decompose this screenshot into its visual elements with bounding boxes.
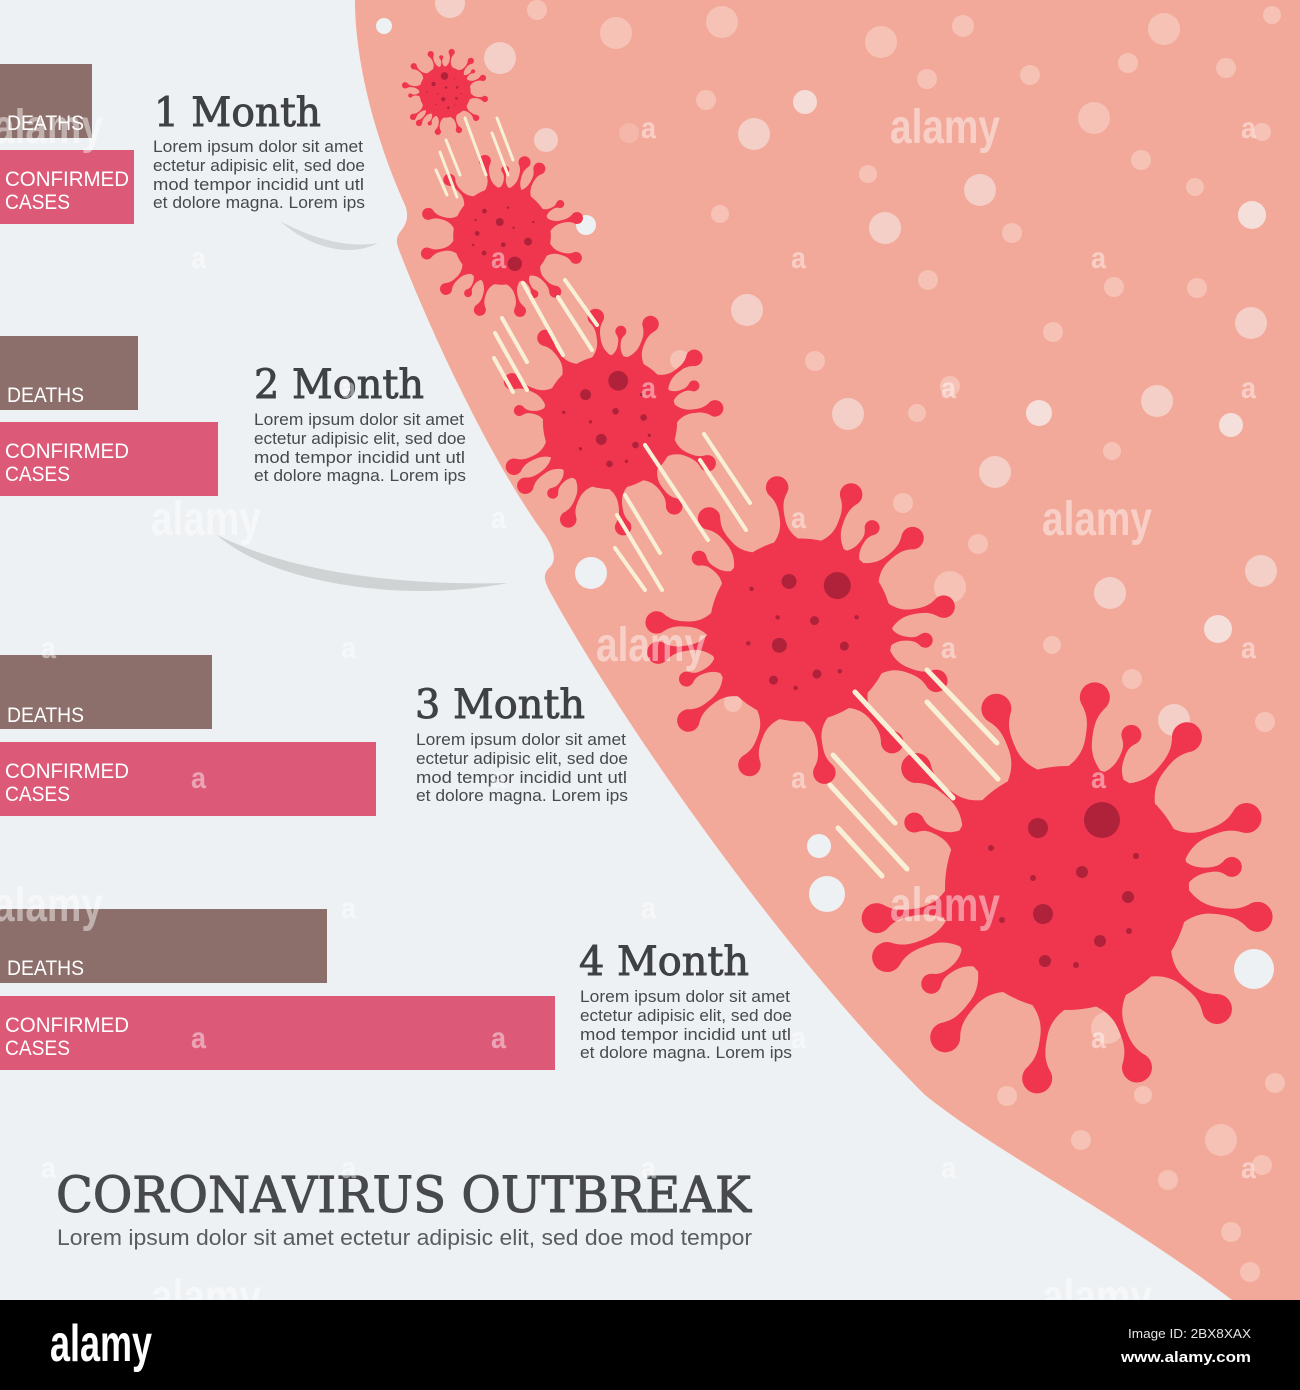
text block: month 2: 2 Month [254,362,424,408]
text block: month 4 [579,939,792,1062]
bar group: month 4: CASES [5,1037,70,1060]
watermarks: alamy [890,879,1000,932]
text block: month 1: Lorem ipsum dolor sit amet [153,137,363,156]
watermarks: a [791,502,806,535]
bar group: month 1: CASES [5,191,70,214]
watermarks: a [341,892,356,925]
bar group: month 4: DEATHS [7,957,84,980]
bar group: month 1 [0,64,134,224]
text block: month 1: et dolore magna. Lorem ips [153,193,365,212]
text block: month 2: ectetur adipisic elit, sed doe [254,429,466,448]
bar group: month 4: CONFIRMED [5,1014,129,1037]
text block: month 2: Lorem ipsum dolor sit amet [254,410,464,429]
footer bar [0,1300,1300,1390]
watermarks: a [941,372,956,405]
watermarks: a [1241,112,1256,145]
bar group: month 3: CONFIRMED [5,760,129,783]
watermarks: alamy [890,101,1000,154]
watermarks: alamy [596,619,706,672]
text block: month 1 [153,90,365,212]
subtitle: Lorem ipsum dolor sit amet ectetur adipisic elit, sed doe mod tempor [57,1225,752,1250]
virus 3 [468,280,752,564]
bar group: month 2: DEATHS [7,384,84,407]
text block: month 3: et dolore magna. Lorem ips [416,786,628,805]
watermarks: a [791,242,806,275]
watermarks: a [941,632,956,665]
watermarks: a [191,1022,206,1055]
bar group: month 3: DEATHS [7,704,84,727]
bar group: month 3 [0,655,376,816]
motion streaks [436,118,998,876]
watermarks: a [1241,632,1256,665]
watermarks: a [641,372,656,405]
watermarks: a [1091,762,1106,795]
watermarks: a [1241,372,1256,405]
watermarks: a [41,632,56,665]
text block: month 4: Lorem ipsum dolor sit amet [580,987,790,1006]
bar group: month 4 [0,909,555,1070]
text block: month 4: 4 Month [579,939,749,985]
title: CORONAVIRUS OUTBREAK [56,1166,753,1224]
watermarks: a [341,632,356,665]
watermarks: a [791,762,806,795]
bar group: month 2: CASES [5,463,70,486]
watermarks: a [941,1152,956,1185]
text block: month 3: mod tempor incidid unt utl [416,768,627,787]
watermarks: alamy [151,1271,261,1324]
watermarks: a [1091,242,1106,275]
virus 1 [385,32,505,152]
bar group: month 1: DEATHS [7,112,84,135]
watermarks: a [341,372,356,405]
text block: month 1: 1 Month [154,90,321,136]
text block: month 3 [415,682,628,805]
footer bar: Image ID: 2BX8XAX [1128,1326,1251,1341]
virus 4 [615,444,987,816]
bar group: month 2: CONFIRMED [5,440,129,463]
decorative bubbles [435,0,1285,1282]
text block: month 2: mod tempor incidid unt utl [254,448,465,467]
watermarks: a [791,1022,806,1055]
watermarks: a [641,1152,656,1185]
virus 2 [385,119,619,353]
watermarks: a [491,242,506,275]
watermarks: alamy [1042,493,1152,546]
watermarks: a [491,1022,506,1055]
watermarks: a [191,762,206,795]
watermarks: a [191,242,206,275]
watermarks: a [1091,1022,1106,1055]
text block: month 1: mod tempor incidid unt utl [153,175,364,194]
watermarks: a [341,1152,356,1185]
mouth line lower [217,535,508,591]
panel: pink face silhouette [355,0,1300,1300]
text block: month 1: ectetur adipisic elit, sed doe [153,156,365,175]
bar group: month 2 [0,336,218,496]
text block: month 4: ectetur adipisic elit, sed doe [580,1006,792,1025]
bar group: month 3: CASES [5,783,70,806]
virus 5 [858,679,1276,1097]
bar group: month 1: CONFIRMED [5,168,129,191]
watermarks: alamy [1042,1271,1152,1324]
watermarks: a [641,892,656,925]
text block: month 3: Lorem ipsum dolor sit amet [416,730,626,749]
watermarks: a [1241,1152,1256,1185]
watermarks: a [491,762,506,795]
footer bar: alamy [50,1315,152,1373]
text block: month 3: 3 Month [415,682,585,728]
watermarks: alamy [151,493,261,546]
mouth line upper [280,221,378,250]
watermarks: a [41,1152,56,1185]
text block: month 4: et dolore magna. Lorem ips [580,1043,792,1062]
footer bar: www.alamy.com [1120,1349,1251,1366]
text block: month 2: et dolore magna. Lorem ips [254,466,466,485]
watermarks: a [491,502,506,535]
text block: month 3: ectetur adipisic elit, sed doe [416,749,628,768]
text block: month 2 [254,362,466,485]
watermarks: a [641,112,656,145]
text block: month 4: mod tempor incidid unt utl [580,1025,791,1044]
white bubbles [376,18,1274,989]
